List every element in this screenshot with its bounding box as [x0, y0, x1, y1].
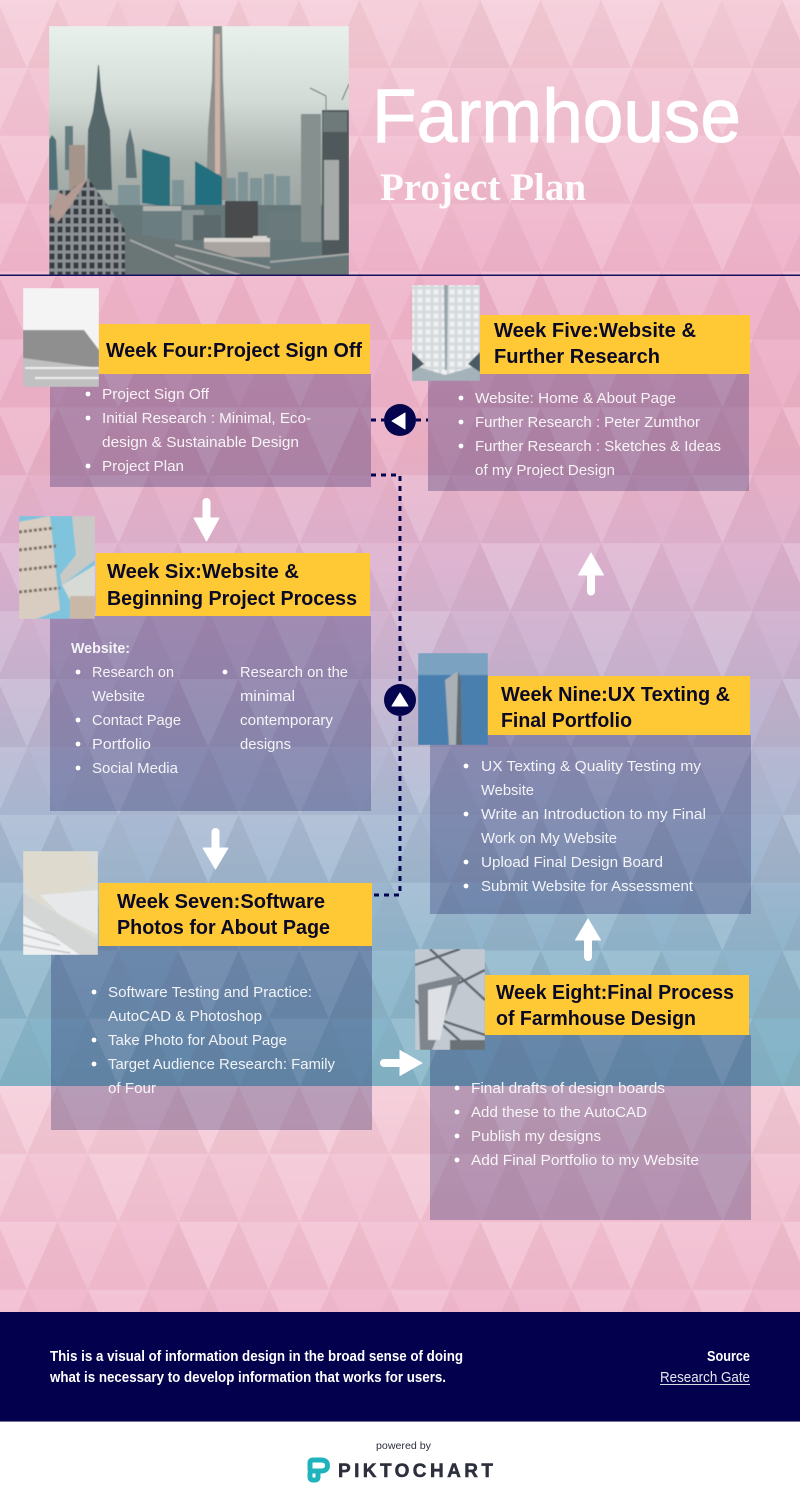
- heading: week four: [99, 324, 370, 374]
- list: week six: contemporary: [240, 712, 333, 729]
- list: week nine: Upload Final Design Board: [481, 854, 663, 871]
- list: week six: Website: [92, 688, 145, 705]
- heading: week seven: [99, 883, 372, 946]
- subtitle: Project Plan: [380, 166, 586, 209]
- list: week nine: Work on My Website: [481, 830, 617, 847]
- header divider line: [0, 274, 800, 276]
- heading: week seven: Photos for About Page: [117, 916, 330, 939]
- image: white staircase: [23, 851, 98, 955]
- image: concrete canopy: [23, 288, 99, 387]
- list: week five: Website: Home & About Page: [475, 390, 676, 407]
- powered by label: powered by: [376, 1441, 431, 1452]
- panel: week four: [23, 288, 371, 487]
- list: week four: Initial Research : Minimal, Eco-: [102, 410, 311, 427]
- list: week nine: [464, 758, 706, 895]
- list: week nine: Submit Website for Assessment: [481, 878, 694, 895]
- heading: week five: Week Five:Website &: [494, 319, 696, 342]
- list: week four: Project Plan: [102, 458, 184, 475]
- panel: week seven: [23, 851, 372, 1130]
- list: week four: design & Sustainable Design: [102, 434, 299, 451]
- list: week six: Research on: [92, 664, 174, 681]
- list: week seven: Take Photo for About Page: [108, 1032, 287, 1049]
- panel: week nine: [418, 653, 751, 914]
- list: week five: of my Project Design: [475, 462, 615, 479]
- connector: dotted line: [371, 420, 428, 895]
- list: week eight: Add Final Portfolio to my Website: [471, 1152, 699, 1169]
- list: week seven: of Four: [108, 1080, 156, 1097]
- arrow: week eight to week nine: [576, 919, 600, 961]
- list: week seven: AutoCAD & Photoshop: [108, 1008, 262, 1025]
- list: week nine: Website: [481, 782, 534, 799]
- list: week seven: Software Testing and Practice:: [108, 984, 312, 1001]
- footer description: what is necessary to develop information that works for users.: [49, 1370, 446, 1386]
- list: week four: [86, 386, 311, 475]
- arrow: week six to week seven: [203, 828, 228, 869]
- heading: week seven: Week Seven:Software: [117, 890, 325, 913]
- image: steel structure: [415, 949, 485, 1050]
- heading: week four: Week Four:Project Sign Off: [106, 339, 362, 362]
- list: week six: minimal: [240, 688, 295, 705]
- list: week four: Project Sign Off: [102, 386, 210, 403]
- footer source: [660, 1349, 750, 1386]
- arrow: week nine to week five: [578, 553, 604, 596]
- list: week eight: Publish my designs: [471, 1128, 601, 1145]
- piktochart logo: PIKTOCHART: [338, 1461, 493, 1482]
- icon: up arrow badge: [384, 684, 416, 716]
- list: week six: designs: [240, 736, 291, 753]
- heading: week nine: Week Nine:UX Texting &: [501, 683, 730, 706]
- image: glass tower: [418, 653, 488, 745]
- footer description: This is a visual of information design in the broad sense of doing: [50, 1349, 463, 1365]
- footer source: Source: [707, 1349, 750, 1365]
- footer band: [0, 1312, 800, 1422]
- heading: week eight: Week Eight:Final Process: [496, 981, 734, 1004]
- arrow: week four to week six: [194, 498, 219, 541]
- list: week nine: Write an Introduction to my Final: [481, 806, 706, 823]
- heading: week six: [96, 553, 370, 616]
- list: week eight: Add these to the AutoCAD: [471, 1104, 647, 1121]
- list: week seven: Target Audience Research: Family: [108, 1056, 335, 1073]
- heading: week five: Further Research: [494, 345, 660, 368]
- footer source: Research Gate: [660, 1370, 750, 1386]
- list: week six: Portfolio: [92, 736, 151, 753]
- title: Farmhouse: [372, 74, 741, 159]
- list: week six: Website:: [71, 640, 130, 657]
- footer description: [49, 1349, 463, 1386]
- panel: week five: [412, 285, 750, 491]
- panel: week eight: [415, 949, 751, 1220]
- heading: week nine: Final Portfolio: [501, 709, 632, 732]
- list: week seven: [92, 984, 335, 1097]
- heading: week six: Week Six:Website &: [107, 560, 299, 583]
- list: week five: Further Research : Peter Zumthor: [475, 414, 700, 431]
- list: week six: Research on the: [240, 664, 348, 681]
- list: week six: Social Media: [92, 760, 179, 777]
- heading: week six: Beginning Project Process: [107, 587, 357, 610]
- icon: left arrow badge: [384, 404, 416, 436]
- heading: week eight: of Farmhouse Design: [496, 1007, 696, 1030]
- list: week five: Further Research : Sketches & Ideas: [475, 438, 721, 455]
- arrow: week seven to week eight: [380, 1050, 422, 1076]
- list: week six: [71, 640, 348, 777]
- heading: week eight: [485, 975, 749, 1035]
- heading: week nine: [487, 676, 750, 735]
- list: week six: Contact Page: [92, 712, 181, 729]
- image: leaning tower and statue: [19, 516, 95, 619]
- image: city skyline: [49, 26, 349, 274]
- heading: week five: [480, 315, 750, 374]
- image: glass facade: [412, 285, 480, 381]
- list: week eight: Final drafts of design boards: [471, 1080, 665, 1097]
- list: week five: [459, 390, 721, 479]
- list: week nine: UX Texting & Quality Testing my: [481, 758, 702, 775]
- list: week eight: [455, 1080, 699, 1169]
- panel: week six: [19, 516, 371, 811]
